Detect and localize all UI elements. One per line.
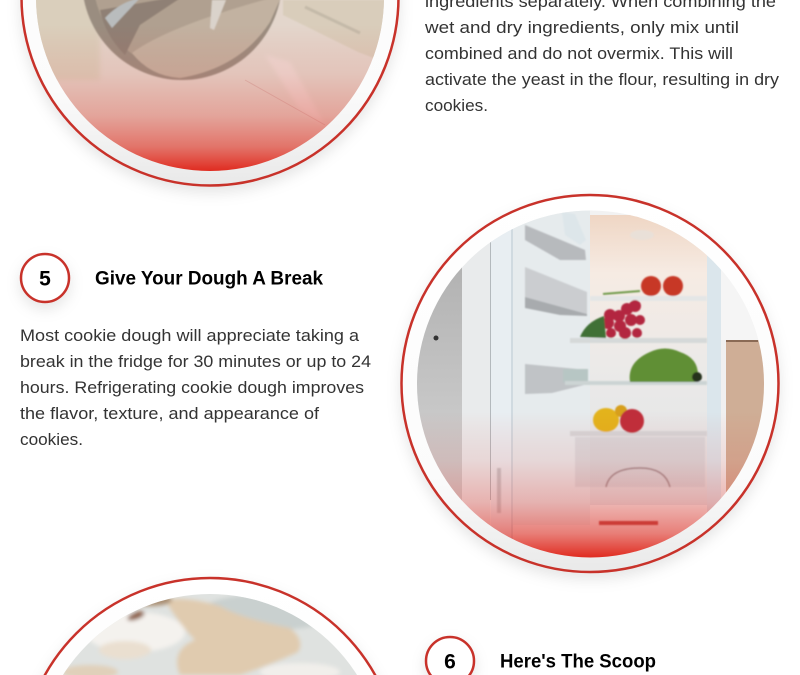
body text: step 5: [20, 326, 371, 449]
peppers: [593, 408, 619, 432]
body text: step 5: hours. Refrigerating cookie dough improves: [20, 378, 364, 397]
body text: step 4: wet and dry ingredients, only mix until: [424, 18, 739, 37]
tomatoes: [641, 276, 661, 296]
image circle: open fridge: [402, 195, 778, 572]
body text: step 4: activate the yeast in the flour, resulting in dry: [425, 70, 780, 89]
step 6 heading: Here's The Scoop: [500, 652, 656, 672]
image circle: cookie dough: [44, 576, 376, 675]
step 5 heading: Give Your Dough A Break: [95, 268, 323, 290]
lettuce: [630, 348, 698, 382]
body text: step 5: cookies.: [20, 430, 83, 449]
shelves: [590, 296, 707, 301]
step 5 number badge: 5: [39, 268, 51, 290]
step 5 number badge: [21, 254, 69, 302]
radishes: [602, 300, 645, 339]
body text: step 4: [424, 0, 780, 115]
body text: step 4: combined and do not overmix. This will: [425, 44, 733, 63]
body text: step 5: Most cookie dough will appreciate taking a: [20, 326, 360, 345]
body text: step 4: cookies.: [425, 96, 488, 115]
image circle: mixing bowl: [22, 0, 400, 186]
wood floor panel: [726, 340, 764, 492]
body text: step 5: break in the fridge for 30 minutes or up to 24: [20, 352, 371, 371]
body text: step 5: the flavor, texture, and appearance of: [20, 404, 319, 423]
step 6 number badge: [426, 637, 474, 675]
fridge door outside: [417, 268, 462, 500]
step 6 number badge: 6: [444, 650, 456, 674]
door shelves: [525, 225, 586, 260]
